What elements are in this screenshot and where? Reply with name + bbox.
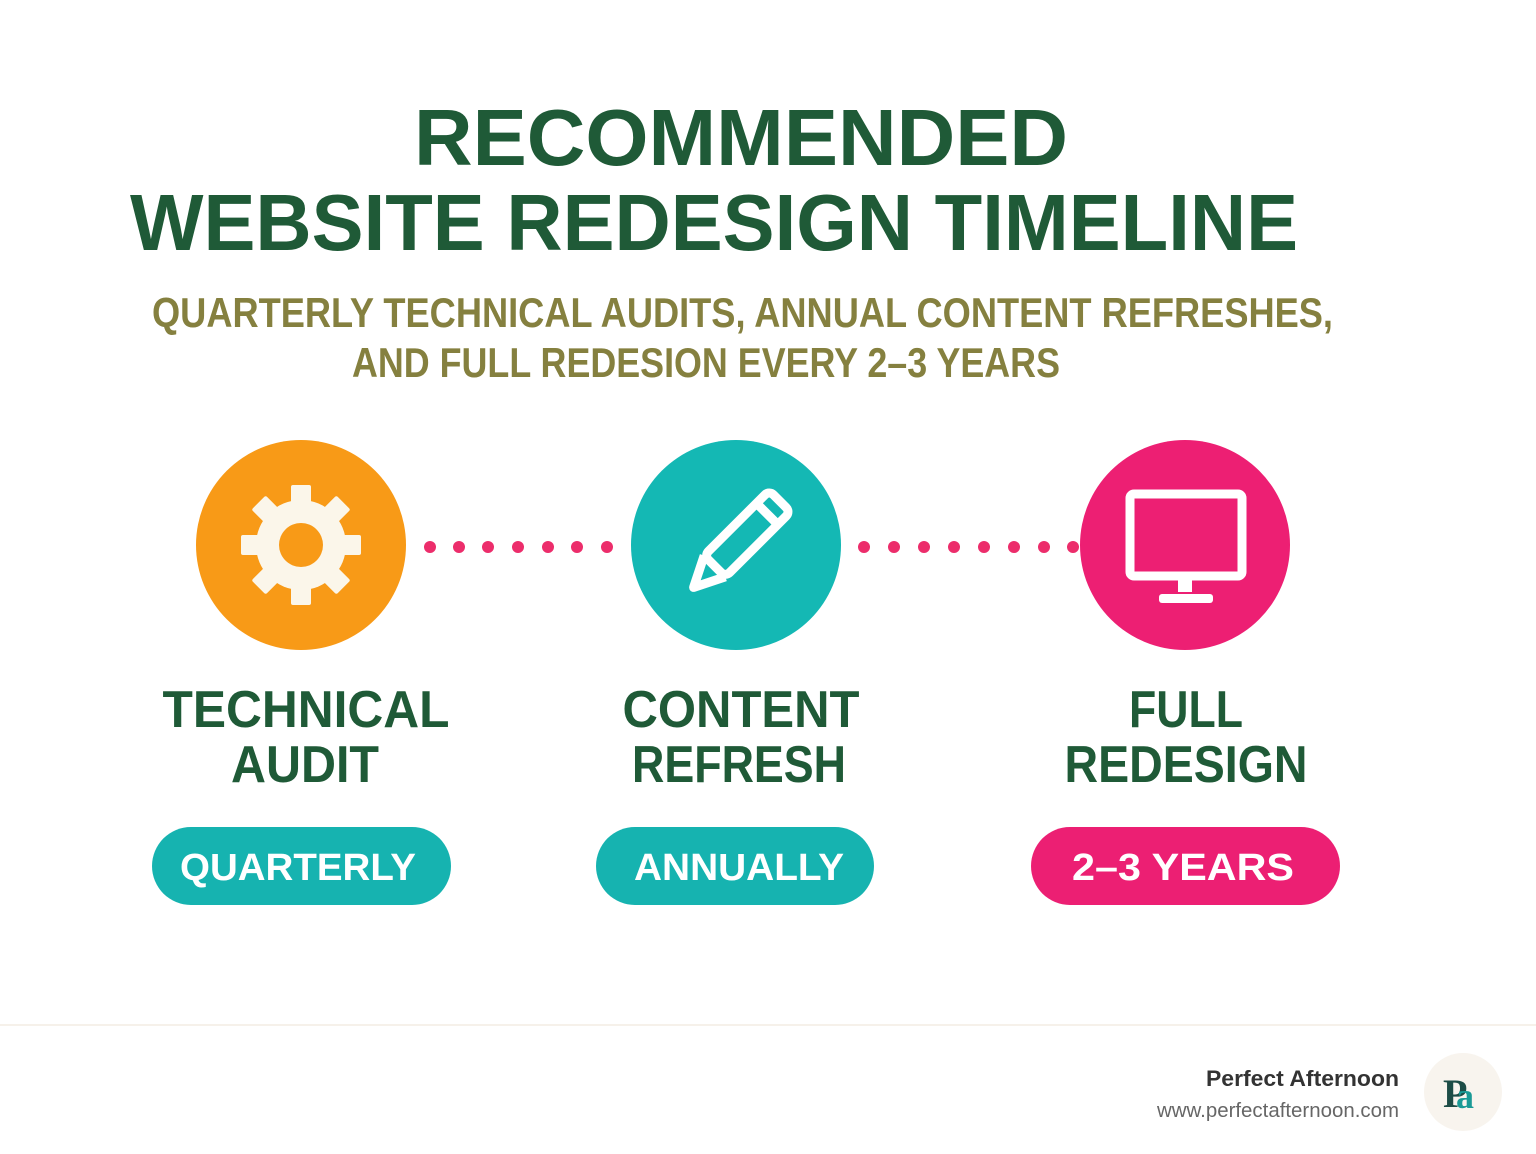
label: content refresh <box>622 681 860 794</box>
label: content refresh: CONTENT <box>622 681 860 739</box>
pill: annually <box>596 827 874 905</box>
title: RECOMMENDED <box>414 93 1068 182</box>
subtitle: AND FULL REDESION EVERY 2–3 YEARS <box>352 339 1060 386</box>
icon: gear in orange circle <box>196 440 406 650</box>
icon: monitor in pink circle <box>1080 440 1290 650</box>
pill: quarterly <box>152 827 451 905</box>
pill: annually: ANNUALLY <box>634 847 844 889</box>
subtitle: QUARTERLY TECHNICAL AUDITS, ANNUAL CONTENT REFRESHES, <box>152 289 1333 336</box>
label: content refresh: REFRESH <box>632 736 846 794</box>
label: full redesign: REDESIGN <box>1064 736 1308 794</box>
connector dots 2 <box>858 541 1079 553</box>
label: technical audit <box>162 681 450 794</box>
footer brand text: www.perfectafternoon.com <box>1156 1100 1399 1122</box>
pill: 2-3 years: 2–3 YEARS <box>1072 847 1294 889</box>
icon: pencil in teal circle <box>631 440 841 650</box>
label: full redesign: FULL <box>1129 681 1243 739</box>
label: full redesign <box>1064 681 1308 794</box>
title: WEBSITE REDESIGN TIMELINE <box>130 178 1298 267</box>
connector dots 1 <box>424 541 613 553</box>
subtitle <box>152 289 1333 386</box>
pill: quarterly: QUARTERLY <box>180 847 416 889</box>
footer brand text: Perfect Afternoon <box>1206 1066 1399 1091</box>
label: technical audit: TECHNICAL <box>162 681 450 739</box>
logo: P <box>1443 1071 1467 1116</box>
pill: 2-3 years <box>1031 827 1340 905</box>
logo <box>1424 1053 1502 1131</box>
logo: a <box>1456 1076 1474 1116</box>
label: technical audit: AUDIT <box>231 736 379 794</box>
title <box>130 93 1298 267</box>
footer brand text <box>1156 1066 1399 1122</box>
